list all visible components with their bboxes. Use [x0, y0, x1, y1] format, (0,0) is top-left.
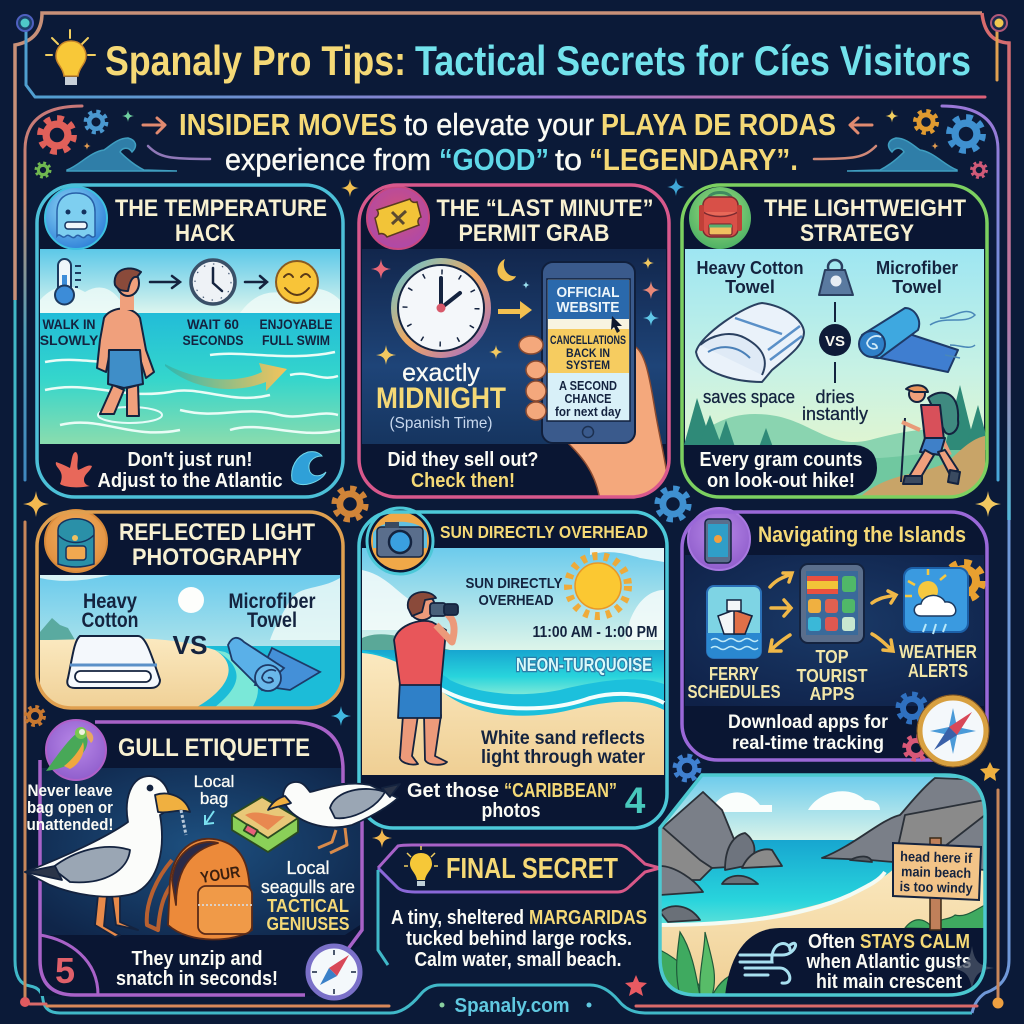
subtitle: “LEGENDARY”.	[589, 142, 798, 177]
scene: towels and hiker: dries	[815, 387, 855, 407]
labels: SCHEDULES	[688, 682, 780, 702]
icon: phone map	[688, 508, 750, 570]
footer text: real-time tracking	[732, 732, 884, 754]
scene: photographer on beach: light through water	[481, 747, 646, 768]
phone: CHANCE	[564, 391, 612, 406]
rolled towel	[228, 638, 320, 691]
sign: main beach	[901, 863, 971, 881]
icon: wave	[292, 452, 326, 485]
arrow	[150, 276, 180, 288]
step number: 5	[55, 950, 75, 991]
heading: GULL ETIQUETTE	[118, 734, 310, 762]
person wading	[97, 268, 154, 416]
phone	[542, 262, 635, 443]
tactical geniuses text	[261, 858, 355, 934]
arrows	[770, 573, 896, 651]
local bag label	[194, 772, 234, 824]
scene: beach with towels: Cotton	[82, 609, 138, 632]
labels	[688, 642, 977, 704]
footer text: snatch in seconds!	[116, 968, 278, 990]
body text	[391, 907, 647, 971]
fingers	[519, 336, 546, 420]
scene: midnight phone: MIDNIGHT	[376, 382, 506, 415]
icon: frozen face	[45, 187, 107, 249]
subtitle: INSIDER MOVES	[179, 107, 397, 142]
scene background	[40, 768, 360, 942]
backpack: YOUR	[199, 864, 242, 887]
labels: SUN DIRECTLY	[466, 575, 562, 592]
scene: beach with towels: Microfiber	[228, 590, 316, 613]
phone: BACK IN	[566, 346, 610, 360]
icon: camera	[367, 508, 433, 574]
icon: backpack	[689, 187, 751, 249]
header decoration left	[36, 110, 210, 177]
labels: Heavy	[83, 590, 137, 613]
heavy towel	[696, 303, 804, 382]
trail	[860, 436, 985, 497]
warning text: bag open or	[27, 798, 113, 817]
heading: PERMIT GRAB	[458, 220, 610, 247]
phone: CANCELLATIONS	[550, 335, 626, 347]
warning text: unattended!	[26, 815, 114, 834]
warning text: Never leave	[28, 781, 112, 800]
labels: ENJOYABLE	[260, 316, 332, 332]
folded towel	[67, 636, 160, 688]
plant	[660, 932, 742, 996]
labels: WAIT 60	[187, 316, 239, 332]
midnight text: exactly	[402, 359, 480, 387]
scene: towels and hiker: saves space	[703, 387, 795, 407]
subtitle: experience from	[225, 142, 431, 177]
arrow	[245, 276, 267, 288]
subtitle: “GOOD”	[439, 142, 549, 177]
icon: parrot	[46, 720, 106, 780]
panel: temperature hack	[37, 185, 343, 497]
scene: sheltered cove	[660, 775, 985, 996]
weight icon	[819, 260, 853, 295]
zipper chain	[181, 810, 186, 835]
labels: WEATHER	[899, 642, 977, 662]
labels	[40, 320, 332, 345]
labels: SLOWLY	[40, 332, 99, 348]
scene: walking into water	[40, 249, 340, 444]
heading: REFLECTED LIGHT	[119, 519, 315, 546]
scene: photographer on beach: 11:00 AM - 1:00 PM	[532, 624, 658, 641]
heading: HACK	[175, 220, 236, 247]
footer text: Did they sell out?	[388, 448, 538, 471]
footer text: Get those	[407, 780, 499, 802]
body text: MARGARIDAS	[529, 907, 647, 929]
header banner: FINAL SECRET	[446, 853, 618, 885]
title	[46, 30, 971, 85]
labels: ALERTS	[908, 661, 968, 681]
icon: teal backpack	[45, 510, 107, 572]
rocks right	[822, 778, 985, 870]
scene: beach with towels	[40, 575, 340, 711]
icon: splash	[56, 452, 92, 487]
heading: THE TEMPERATURE	[115, 195, 327, 222]
footer text	[407, 780, 617, 822]
phone: OFFICIAL	[556, 285, 620, 301]
sun	[568, 556, 628, 616]
footer text	[388, 448, 538, 492]
icon: wind	[740, 943, 796, 983]
icon: light bulb	[46, 30, 95, 85]
footer pill	[685, 445, 877, 497]
tactical geniuses text: Local	[286, 858, 330, 878]
scene: towels and hiker	[684, 249, 990, 497]
text: hit main crescent	[816, 971, 962, 993]
roll towel	[859, 308, 958, 372]
footer text: Adjust to the Atlantic	[98, 469, 282, 492]
scene: towels and hiker: instantly	[802, 404, 868, 424]
panel: navigating the islands	[682, 508, 989, 767]
scene: photographer on beach: White sand reflects	[481, 728, 645, 749]
footer text: Download apps for	[728, 711, 888, 733]
panel: last minute permit	[359, 185, 670, 500]
footer pill: on look-out hike!	[707, 469, 855, 492]
subtitle: to elevate your	[404, 107, 594, 142]
text: when Atlantic gusts	[806, 951, 972, 973]
scene: midnight phone: (Spanish Time)	[390, 415, 492, 432]
text	[806, 931, 972, 993]
footer text	[98, 448, 282, 492]
title: Spanaly Pro Tips:	[105, 37, 406, 84]
thermometer	[55, 259, 81, 304]
labels: APPS	[810, 684, 854, 704]
labels: FULL SWIM	[262, 332, 330, 348]
scene: towels and hiker: Microfiber	[876, 258, 958, 278]
tactical geniuses text: TACTICAL	[267, 896, 349, 916]
icon: gold compass	[917, 695, 989, 767]
footer pill: Every gram counts	[700, 448, 862, 471]
labels: Heavy Cotton	[696, 258, 804, 278]
footer text: They unzip and	[132, 948, 262, 970]
panel: sun directly overhead	[359, 508, 667, 828]
footer text: Don't just run!	[128, 448, 252, 471]
panel: margaridas beach	[660, 775, 994, 996]
heading: STRATEGY	[800, 220, 914, 247]
footer text: photos	[482, 800, 540, 822]
subtitle: PLAYA DE RODAS	[601, 107, 836, 142]
footer text: “CARIBBEAN”	[504, 780, 617, 802]
rocks left	[660, 792, 782, 922]
icon: ticket	[367, 187, 429, 249]
scene: towels and hiker: Towel	[892, 277, 942, 297]
panel: lightweight strategy	[682, 185, 990, 497]
decorative stars and gears between panels	[23, 178, 1001, 996]
sign: is too windy	[899, 878, 973, 896]
warning text	[26, 781, 114, 834]
heading	[764, 195, 966, 247]
heading: THE LIGHTWEIGHT	[764, 195, 966, 222]
heading	[115, 195, 327, 247]
sign	[893, 838, 981, 930]
scene: photographer on beach: OVERHEAD	[478, 592, 554, 609]
grey sparkle	[950, 946, 994, 990]
scene: photographer on beach	[362, 548, 664, 775]
labels: TOP	[816, 647, 848, 667]
footer dark	[725, 928, 985, 996]
body text: A tiny, sheltered	[391, 907, 524, 929]
vs badge	[819, 324, 851, 356]
gear and weather tile	[946, 563, 982, 599]
footer text	[728, 711, 888, 754]
phone: WEBSITE	[556, 300, 620, 316]
outline	[40, 722, 362, 995]
labels: FERRY	[709, 664, 759, 684]
heading: SUN DIRECTLY OVERHEAD	[440, 522, 648, 542]
lunchbox	[232, 797, 298, 852]
sign: head here if	[900, 848, 973, 866]
text: Often	[808, 931, 855, 953]
scene: towels and hiker: Towel	[725, 277, 775, 297]
smile	[276, 261, 318, 303]
arrow	[498, 301, 532, 319]
panel: gull etiquette	[25, 720, 400, 998]
heading	[436, 195, 654, 247]
heading: PHOTOGRAPHY	[132, 544, 302, 571]
scene: photographer on beach: NEON-TURQUOISE	[516, 655, 652, 675]
vs badge: VS	[825, 333, 845, 350]
footer url: Spanaly.com	[454, 995, 570, 1017]
scene: beach with towels: Towel	[247, 609, 297, 632]
local bag label: bag	[200, 789, 228, 808]
bush	[905, 905, 985, 930]
body text: tucked behind large rocks.	[406, 928, 632, 950]
tablet	[800, 564, 864, 643]
hiker	[901, 385, 960, 484]
icon: compass	[308, 946, 360, 998]
panel: reflected light	[37, 510, 343, 711]
photographer	[394, 592, 458, 765]
heading: THE “LAST MINUTE”	[436, 195, 654, 222]
header decoration right	[814, 110, 986, 177]
clock	[391, 258, 491, 358]
sun	[178, 587, 204, 613]
step number: 4	[625, 780, 646, 821]
hand	[565, 345, 670, 500]
text: STAYS CALM	[860, 931, 970, 953]
labels: TOURIST	[796, 666, 868, 686]
tactical geniuses text: seagulls are	[261, 877, 355, 897]
clock	[191, 260, 235, 304]
heading	[119, 519, 315, 571]
small gull	[268, 782, 400, 853]
gold arrow	[165, 363, 287, 391]
phone: for next day	[555, 404, 622, 419]
subtitle: to	[555, 142, 582, 177]
subtitle	[179, 107, 836, 177]
phone: SYSTEM	[566, 358, 610, 372]
scene: beach with towels: VS	[172, 630, 208, 660]
local bag label: Local	[194, 772, 234, 791]
panel: final secret	[378, 845, 660, 971]
labels: WALK IN	[42, 316, 96, 332]
ferry tile	[707, 586, 761, 658]
phone: A SECOND	[559, 378, 617, 393]
backpack	[147, 839, 252, 940]
scene: travel apps	[685, 555, 984, 706]
icon: bulb	[404, 846, 438, 886]
scene: midnight phone	[362, 249, 670, 500]
body text: Calm water, small beach.	[414, 949, 622, 971]
labels: SECONDS	[182, 332, 244, 348]
large gull	[25, 776, 190, 937]
heading: Navigating the Islands	[758, 522, 966, 547]
tactical geniuses text: GENIUSES	[266, 914, 350, 934]
icon: moon	[497, 259, 516, 281]
footer text: Check then!	[411, 469, 515, 492]
header banner	[378, 845, 660, 892]
footer text	[116, 948, 278, 990]
